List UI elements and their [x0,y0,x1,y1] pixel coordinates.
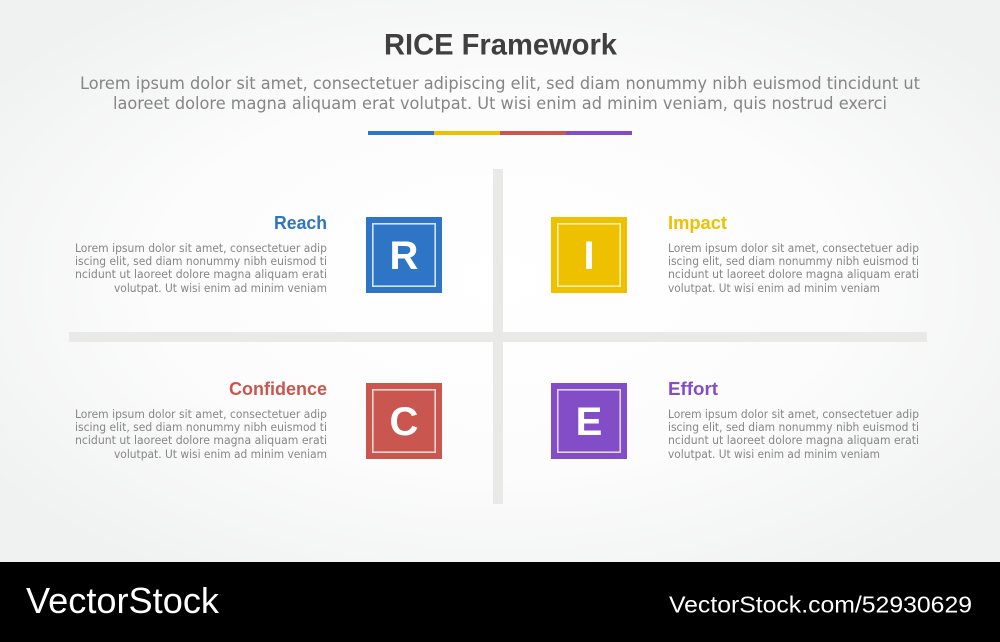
icon: letter I square: I [583,234,595,278]
text block: impact: volutpat. Ut wisi enim ad minim veniam [668,281,880,295]
title: RICE Framework [384,28,617,62]
text block: confidence: Lorem ipsum dolor sit amet, consectetuer adip [75,407,327,421]
icon: letter R square [366,217,442,293]
panel: confidence [75,379,442,461]
icon: letter E square [551,383,627,459]
subtitle text block: laoreet dolore magna aliquam erat volutpat. Ut wisi enim ad minim veniam, quis nostrud exerci [113,94,887,114]
text block: impact: iscing elit, sed diam nonummy nibh euismod ti [668,254,919,268]
heading: impact: Impact [668,213,727,233]
text block: effort: iscing elit, sed diam nonummy nibh euismod ti [668,420,919,434]
text block: effort: ncidunt ut laoreet dolore magna aliquam erati [668,433,919,447]
text block: reach: Lorem ipsum dolor sit amet, consectetuer adip [75,241,327,255]
panel: reach [75,213,442,295]
text block: effort [668,407,919,461]
text block: reach: iscing elit, sed diam nonummy nibh euismod ti [75,254,327,268]
text block: confidence: volutpat. Ut wisi enim ad minim veniam [114,447,327,461]
text block: reach: ncidunt ut laoreet dolore magna aliquam erati [75,267,327,281]
quadrant cross axes [69,169,927,504]
panel: impact [551,213,919,295]
text block: impact: ncidunt ut laoreet dolore magna aliquam erati [668,267,919,281]
text block: impact: Lorem ipsum dolor sit amet, consectetuer adip [668,241,919,255]
text block: reach [75,241,327,295]
icon: letter I square [551,217,627,293]
text block: impact [668,241,919,295]
text block: confidence [75,407,327,461]
icon: letter E square: E [576,400,602,444]
watermark url text: VectorStock.com/52930629 [669,592,972,618]
watermark footer band [0,562,1000,642]
text block: confidence: iscing elit, sed diam nonummy nibh euismod ti [75,420,327,434]
heading: confidence: Confidence [229,379,327,399]
subtitle text block [80,74,920,114]
heading: reach: Reach [274,213,327,233]
panel: effort [551,379,919,461]
subtitle text block: Lorem ipsum dolor sit amet, consectetuer adipiscing elit, sed diam nonummy nibh euismod tincidunt ut [80,74,920,94]
text block: effort: Lorem ipsum dolor sit amet, consectetuer adip [668,407,919,421]
watermark logo text: VectorStock [26,580,220,621]
text block: reach: volutpat. Ut wisi enim ad minim veniam [114,281,327,295]
text block: effort: volutpat. Ut wisi enim ad minim veniam [668,447,880,461]
heading: effort: Effort [668,379,718,399]
four colour divider bar [368,131,632,135]
icon: letter R square: R [390,234,419,278]
icon: letter C square: C [390,400,418,444]
text block: confidence: ncidunt ut laoreet dolore magna aliquam erati [75,433,327,447]
icon: letter C square [366,383,442,459]
